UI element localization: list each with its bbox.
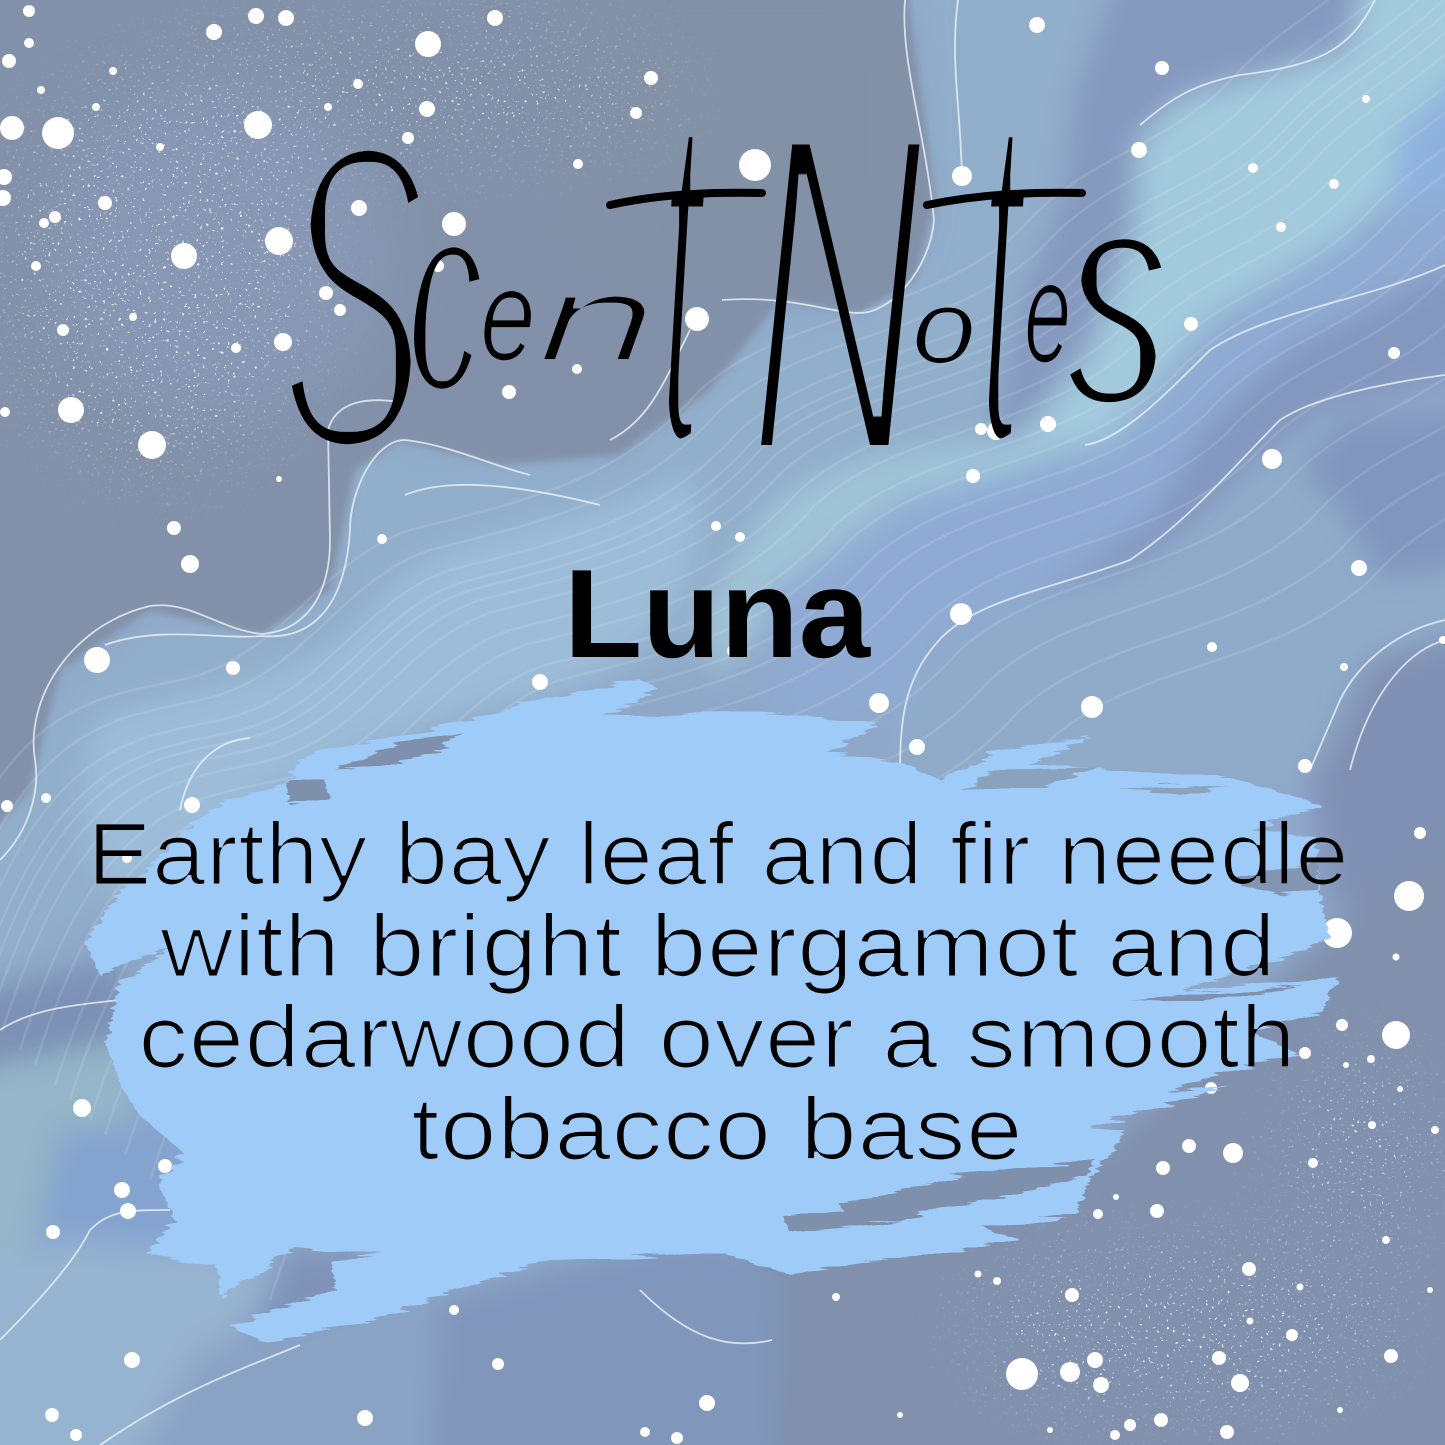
- heading: Luna: Luna: [564, 543, 871, 684]
- blue paint brush stroke: [85, 680, 1340, 1342]
- title: Scent Notes: o: [912, 269, 976, 386]
- description text block: cedarwood over a smooth: [138, 989, 1296, 1086]
- title: Scent Notes: t: [980, 0, 1027, 548]
- description text block: with bright bergamot and: [159, 898, 1276, 995]
- title: Scent Notes: N: [748, 37, 928, 552]
- title: Scent Notes: [280, 0, 1169, 552]
- grey upper-left sky: [0, 0, 935, 890]
- title: Scent Notes: n: [536, 252, 658, 386]
- title: Scent Notes: S: [280, 50, 427, 545]
- title: Scent Notes: s: [1066, 116, 1169, 473]
- title: Scent Notes: e: [480, 242, 536, 388]
- title: Scent Notes: c: [408, 139, 483, 452]
- description text block: Earthy bay leaf and fir needle: [87, 806, 1349, 903]
- dry-brush gaps: [285, 735, 1318, 1232]
- description text block: tobacco base: [411, 1081, 1023, 1178]
- title: Scent Notes: t: [660, 0, 707, 548]
- description text block: [87, 806, 1349, 1178]
- title: Scent Notes: e: [1024, 231, 1071, 394]
